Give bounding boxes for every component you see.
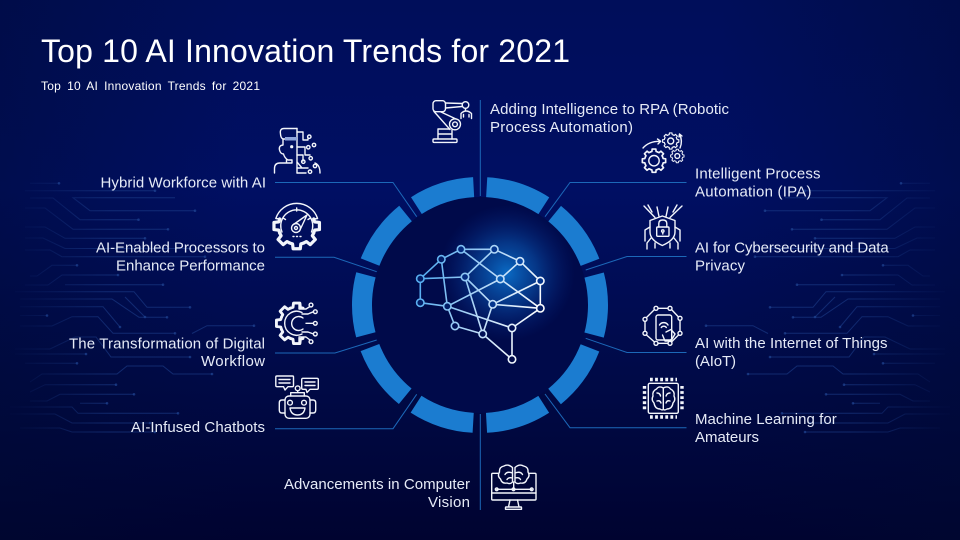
icon: chatbot xyxy=(276,376,318,418)
label: digital workflow: Workflow xyxy=(201,353,265,370)
label: processors: AI-Enabled Processors to xyxy=(96,240,265,257)
label: computer vision: Vision xyxy=(428,494,470,511)
segmented ring xyxy=(356,181,604,429)
label: digital workflow xyxy=(69,335,265,370)
icon: computer vision monitor xyxy=(492,465,536,509)
circuit pattern: left xyxy=(10,183,254,432)
brain network xyxy=(417,246,544,363)
label: computer vision: Advancements in Computer xyxy=(284,476,470,493)
label: machine learning: Machine Learning for xyxy=(695,411,837,428)
connector lines xyxy=(275,100,686,510)
label: AIoT: AI with the Internet of Things xyxy=(695,335,888,352)
icon: robot arm xyxy=(433,101,472,142)
icon: brain chip xyxy=(644,380,682,417)
label: digital workflow: The Transformation of Digital xyxy=(69,335,265,352)
circuit pattern: right xyxy=(706,183,950,432)
label: cybersecurity: Privacy xyxy=(695,258,746,275)
icon: performance gauge gear xyxy=(274,203,319,249)
icon: hybrid human AI head xyxy=(274,128,320,173)
label: RPA: Adding Intelligence to RPA (Robotic xyxy=(490,101,730,118)
label: machine learning xyxy=(695,411,837,446)
label: cybersecurity: AI for Cybersecurity and Data xyxy=(695,240,889,257)
icon: cybersecurity shield xyxy=(644,205,682,249)
label: processors: Enhance Performance xyxy=(116,258,265,275)
label: RPA: Process Automation) xyxy=(490,119,633,136)
central disc glow xyxy=(372,197,588,413)
icon: digital workflow gear xyxy=(276,303,317,344)
label: processors xyxy=(96,240,265,275)
label: IPA xyxy=(695,166,820,200)
label: RPA xyxy=(490,101,730,136)
label: computer vision xyxy=(284,476,470,511)
label: IPA: Intelligent Process xyxy=(695,166,820,182)
subtitle: Top 10 AI Innovation Trends for 2021 xyxy=(41,79,260,93)
label: AIoT xyxy=(695,335,888,370)
label: machine learning: Amateurs xyxy=(695,429,759,446)
label: hybrid workforce: Hybrid Workforce with AI xyxy=(100,175,266,192)
label: cybersecurity xyxy=(695,240,889,275)
icon: process automation gears xyxy=(642,133,684,172)
label: IPA: Automation (IPA) xyxy=(695,184,812,200)
label: AIoT: (AIoT) xyxy=(695,353,736,370)
label: chatbots: AI-Infused Chatbots xyxy=(131,419,265,436)
icon: IoT phone network xyxy=(643,306,682,345)
title: Top 10 AI Innovation Trends for 2021 xyxy=(41,33,570,69)
